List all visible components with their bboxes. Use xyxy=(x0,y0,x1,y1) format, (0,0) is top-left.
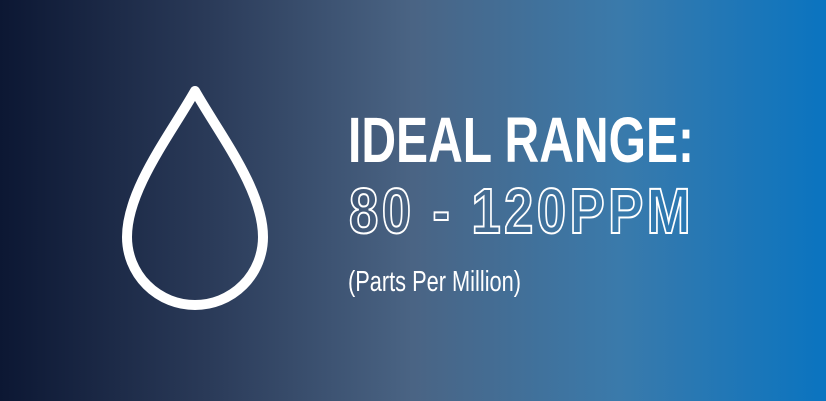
caption: parts per million: (Parts Per Million) xyxy=(348,266,521,298)
icon: water drop xyxy=(127,91,263,305)
value: 80 - 120PPM outlined: 80 - 120PPM xyxy=(349,175,694,247)
heading: ideal range: IDEAL RANGE: xyxy=(348,104,694,176)
